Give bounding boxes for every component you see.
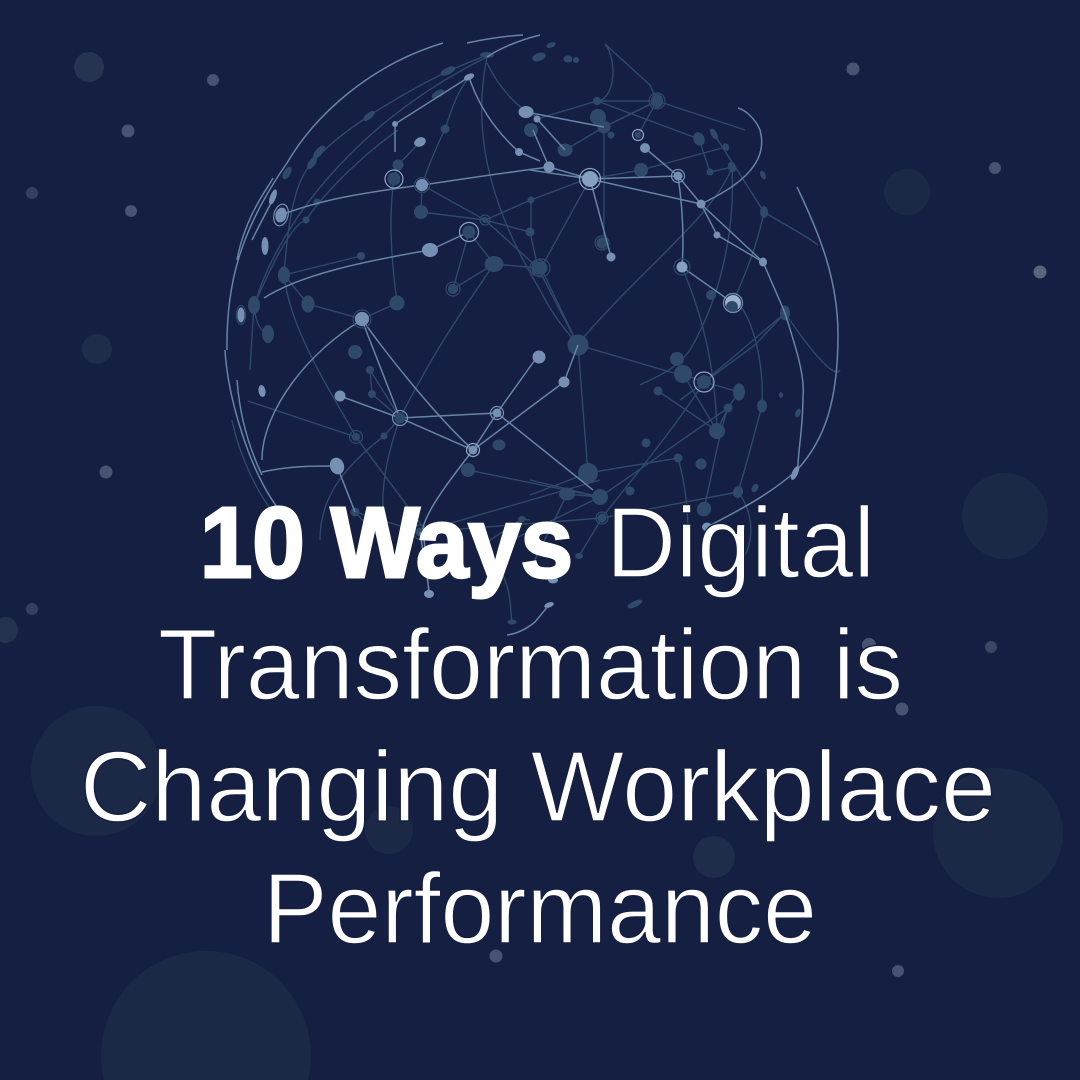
title line 4: Performance	[263, 853, 817, 965]
title	[80, 487, 996, 965]
globe: ringed nodes	[236, 130, 742, 456]
title line 1: 10 Ways	[200, 487, 573, 599]
globe: dark nodes	[248, 41, 802, 624]
title line 2: Transformation is	[158, 609, 903, 721]
title line 3: Changing Workplace	[80, 731, 996, 843]
title line 1: Digital	[606, 487, 875, 599]
globe: light connection lines	[225, 35, 838, 635]
title line 1	[200, 487, 875, 599]
globe: light nodes	[258, 72, 801, 609]
globe network	[225, 35, 840, 635]
globe: dark connection lines	[232, 44, 840, 622]
globe: dark ring nodes	[350, 93, 665, 539]
